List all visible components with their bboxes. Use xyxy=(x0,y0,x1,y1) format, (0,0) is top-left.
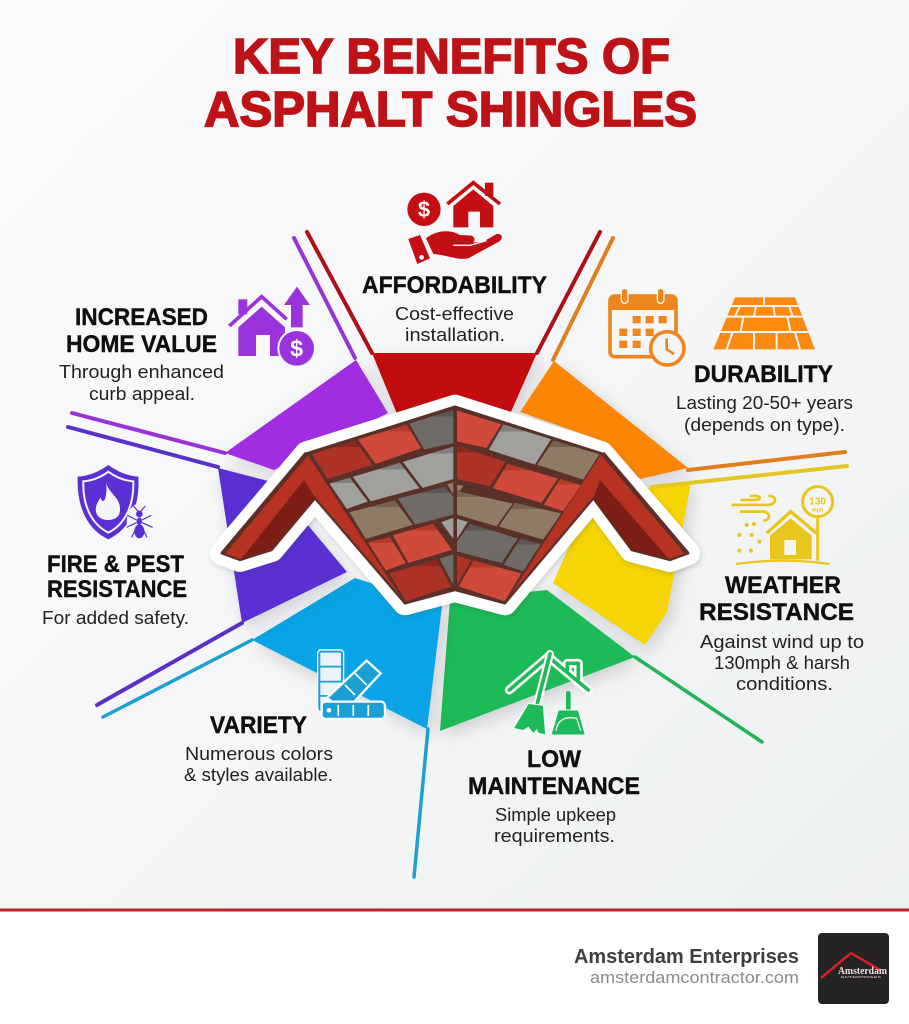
red wedge xyxy=(372,353,537,414)
description: & styles available. xyxy=(184,764,333,785)
description: Simple upkeep xyxy=(495,804,616,825)
central roof illustration xyxy=(222,407,688,603)
heading: VARIETY xyxy=(210,712,307,739)
heading: MAINTENANCE xyxy=(468,773,640,800)
panel: durability xyxy=(520,238,853,479)
title: ASPHALT SHINGLES xyxy=(204,83,697,137)
heading: WEATHER xyxy=(725,572,841,599)
panel: variety xyxy=(103,578,442,877)
description: curb appeal. xyxy=(89,383,195,404)
heading: INCREASED xyxy=(75,304,208,331)
purple wedge xyxy=(225,360,388,470)
heading: LOW xyxy=(527,746,581,773)
description: conditions. xyxy=(736,673,833,694)
description: Numerous colors xyxy=(185,743,333,764)
heading xyxy=(468,746,640,800)
indigo wedge xyxy=(218,468,347,623)
heading: RESISTANCE xyxy=(699,599,854,626)
icon: shingles xyxy=(713,297,815,349)
heading: HOME VALUE xyxy=(66,331,217,358)
panel: affordability xyxy=(307,183,600,414)
icon: house with rising value: $ xyxy=(290,336,303,362)
company name and website: Amsterdam Enterprises xyxy=(574,946,799,968)
heading: DURABILITY xyxy=(694,361,833,388)
green divider line xyxy=(635,657,762,742)
description xyxy=(395,303,514,345)
description: 130mph & harsh xyxy=(714,652,850,673)
icon: hand holding house and dollar: $ xyxy=(418,197,430,222)
icon: hand holding house and dollar xyxy=(407,183,502,264)
heading: AFFORDABILITY xyxy=(362,272,547,299)
logo: Amsterdam xyxy=(838,966,888,977)
orange wedge xyxy=(520,361,688,479)
blue wedge xyxy=(252,578,442,729)
purple divider lines xyxy=(72,238,355,453)
icon: wind, rain and house: mph xyxy=(812,507,823,513)
heading xyxy=(66,304,217,358)
description xyxy=(676,392,853,435)
description: installation. xyxy=(405,324,505,345)
icon: house with rising value xyxy=(229,287,316,368)
panel: low maintenance xyxy=(440,590,762,846)
green wedge xyxy=(440,590,635,731)
description: Cost-effective xyxy=(395,303,514,324)
blue divider lines xyxy=(103,640,428,877)
company name and website xyxy=(574,946,799,987)
footer band xyxy=(0,908,909,1024)
panel: fire and pest resistance xyxy=(42,427,347,705)
description: (depends on type). xyxy=(684,414,845,435)
description xyxy=(700,631,864,694)
icon: roof, broom and dustpan xyxy=(509,654,588,735)
heading: RESISTANCE xyxy=(47,576,187,603)
icon: calendar with clock xyxy=(610,288,684,365)
company name and website: amsterdamcontractor.com xyxy=(590,968,799,987)
description: Through enhanced xyxy=(59,361,224,382)
heading: FIRE & PEST xyxy=(47,551,184,578)
description: Lasting 20-50+ years xyxy=(676,392,853,413)
red divider lines xyxy=(307,232,600,353)
heading xyxy=(699,572,854,626)
indigo divider lines xyxy=(68,427,242,705)
description xyxy=(184,743,333,785)
yellow wedge xyxy=(553,482,691,645)
description xyxy=(59,361,224,404)
icon: shield, flame and ant xyxy=(78,465,153,540)
description: Against wind up to xyxy=(700,631,864,652)
icon: colour swatch fan xyxy=(319,652,385,719)
panel: weather resistance xyxy=(553,466,864,694)
description xyxy=(494,804,616,846)
logo: ENTERPRISES xyxy=(841,975,881,979)
icon: wind, rain and house xyxy=(732,487,833,564)
title xyxy=(204,30,697,137)
description: For added safety. xyxy=(42,607,189,628)
yellow divider line xyxy=(652,466,847,487)
title: KEY BENEFITS OF xyxy=(233,30,670,84)
heading xyxy=(47,551,187,603)
panel: increased home value xyxy=(59,238,388,470)
description: requirements. xyxy=(494,825,615,846)
icon: wind, rain and house: 130 xyxy=(809,496,826,507)
orange divider lines xyxy=(553,238,845,470)
logo xyxy=(818,933,889,1004)
